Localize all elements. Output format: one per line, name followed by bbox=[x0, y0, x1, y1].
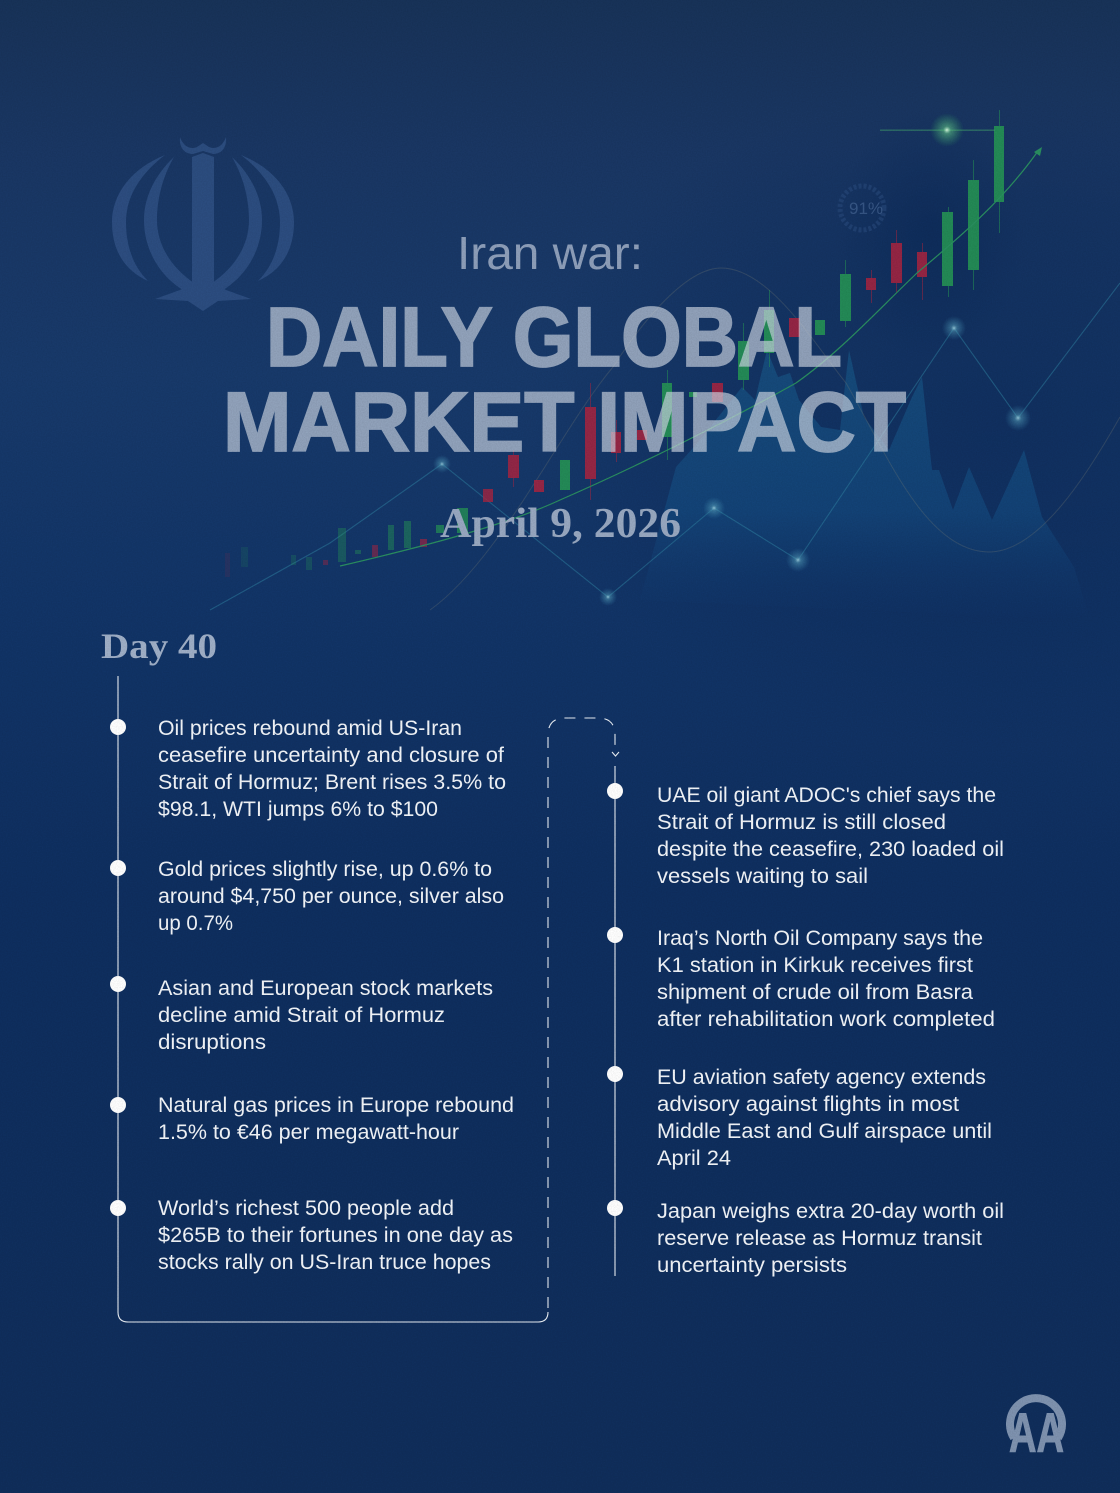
item: Japan: reserve release as Hormuz transit bbox=[657, 1226, 982, 1250]
item: stock markets: disruptions bbox=[158, 1030, 266, 1054]
item: EU aviation: EU aviation safety agency extends bbox=[657, 1065, 986, 1089]
item: ADOC: UAE oil giant ADOC's chief says the bbox=[657, 783, 996, 807]
subtitle: Iran war: bbox=[457, 227, 643, 279]
item: oil prices: Oil prices rebound amid US-Iran bbox=[158, 716, 462, 740]
emblem: Iran coat of arms bbox=[112, 137, 294, 311]
item: gold prices: around $4,750 per ounce, silver also bbox=[158, 884, 504, 908]
item: oil prices: $98.1, WTI jumps 6% to $100 bbox=[158, 797, 438, 821]
item: Iraq North Oil: after rehabilitation work completed bbox=[657, 1007, 995, 1031]
item: gold prices bbox=[158, 857, 504, 935]
item: richest people: stocks rally on US-Iran truce hopes bbox=[158, 1250, 491, 1274]
item: ADOC: Strait of Hormuz is still closed bbox=[657, 810, 946, 834]
item: Iraq North Oil bbox=[657, 926, 995, 1031]
trend arrow bbox=[340, 147, 1042, 566]
item: oil prices: Strait of Hormuz; Brent rises 3.5% to bbox=[158, 770, 506, 794]
item: oil prices bbox=[158, 716, 506, 821]
logo: AA: AA bbox=[1009, 1401, 1064, 1464]
item: EU aviation: April 24 bbox=[657, 1146, 731, 1170]
candlestick chart bbox=[225, 110, 1004, 577]
item: ADOC bbox=[657, 783, 1004, 888]
logo: AA bbox=[1009, 1398, 1064, 1464]
item: ADOC: vessels waiting to sail bbox=[657, 864, 868, 888]
item: richest people bbox=[158, 1196, 513, 1274]
sine curve bbox=[430, 268, 1120, 610]
chart backdrop: dark silhouette and percent ring: 91% bbox=[849, 199, 883, 218]
chart backdrop: dark silhouette and percent ring bbox=[835, 110, 1025, 360]
title: MARKET IMPACT bbox=[223, 375, 906, 469]
timeline connector bbox=[118, 676, 619, 1322]
item: natural gas bbox=[158, 1093, 514, 1144]
item: natural gas: 1.5% to €46 per megawatt-hour bbox=[158, 1120, 459, 1144]
item: stock markets bbox=[158, 976, 493, 1054]
item: Iraq North Oil: Iraq’s North Oil Company says the bbox=[657, 926, 983, 950]
date: April 9, 2026 bbox=[440, 501, 681, 547]
item: EU aviation: Middle East and Gulf airspace until bbox=[657, 1119, 992, 1143]
item: EU aviation bbox=[657, 1065, 992, 1170]
item: EU aviation: advisory against flights in most bbox=[657, 1092, 959, 1116]
item: richest people: $265B to their fortunes in one day as bbox=[158, 1223, 513, 1247]
item: Iraq North Oil: K1 station in Kirkuk receives first bbox=[657, 953, 973, 977]
item: natural gas: Natural gas prices in Europe rebound bbox=[158, 1093, 514, 1117]
item: Japan: Japan weighs extra 20-day worth oil bbox=[657, 1199, 1004, 1223]
mountain area chart bbox=[640, 350, 1090, 620]
item: stock markets: Asian and European stock markets bbox=[158, 976, 493, 1000]
item: Japan bbox=[657, 1199, 1004, 1277]
item: oil prices: ceasefire uncertainty and closure of bbox=[158, 743, 504, 767]
item: gold prices: Gold prices slightly rise, up 0.6% to bbox=[158, 857, 492, 881]
heading: day: Day 40 bbox=[101, 626, 217, 666]
item: stock markets: decline amid Strait of Hormuz bbox=[158, 1003, 445, 1027]
star glow bbox=[880, 113, 995, 147]
timeline dots bbox=[110, 719, 623, 1216]
item: Iraq North Oil: shipment of crude oil from Basra bbox=[657, 980, 973, 1004]
title: DAILY GLOBAL bbox=[266, 290, 842, 384]
item: Japan: uncertainty persists bbox=[657, 1253, 847, 1277]
item: richest people: World’s richest 500 people add bbox=[158, 1196, 454, 1220]
item: gold prices: up 0.7% bbox=[158, 911, 233, 935]
item: ADOC: despite the ceasefire, 230 loaded oil bbox=[657, 837, 1004, 861]
network line chart bbox=[210, 283, 1120, 610]
title bbox=[223, 290, 906, 469]
